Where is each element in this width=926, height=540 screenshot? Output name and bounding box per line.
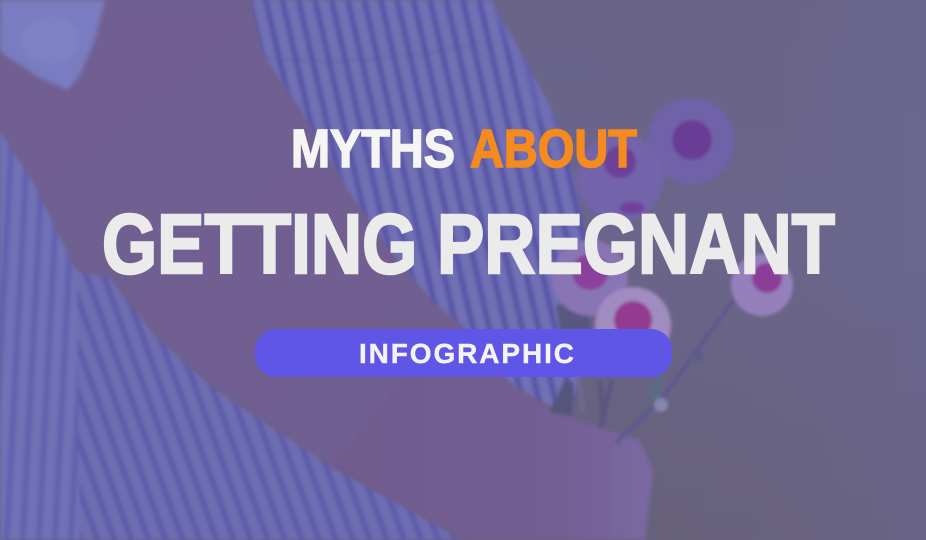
- upper dress with stripes: [250, 0, 590, 410]
- title line 1: [291, 119, 637, 179]
- arm: [0, 0, 653, 540]
- flower: right: [731, 254, 793, 316]
- sleeve lace: [0, 0, 105, 90]
- flower: top right: [649, 99, 733, 183]
- flower: lower: [595, 287, 671, 363]
- title word: about: ABOUT: [470, 119, 637, 179]
- badge: [255, 329, 672, 377]
- badge pill: [255, 329, 672, 377]
- badge label: INFOGRAPHIC: [359, 338, 574, 369]
- flower stems and leaves: [550, 298, 735, 443]
- flower: behind title: [552, 202, 644, 316]
- flower: middle: [578, 136, 662, 220]
- lower dress with stripes: [0, 130, 463, 540]
- title word: myths: MYTHS: [291, 119, 455, 179]
